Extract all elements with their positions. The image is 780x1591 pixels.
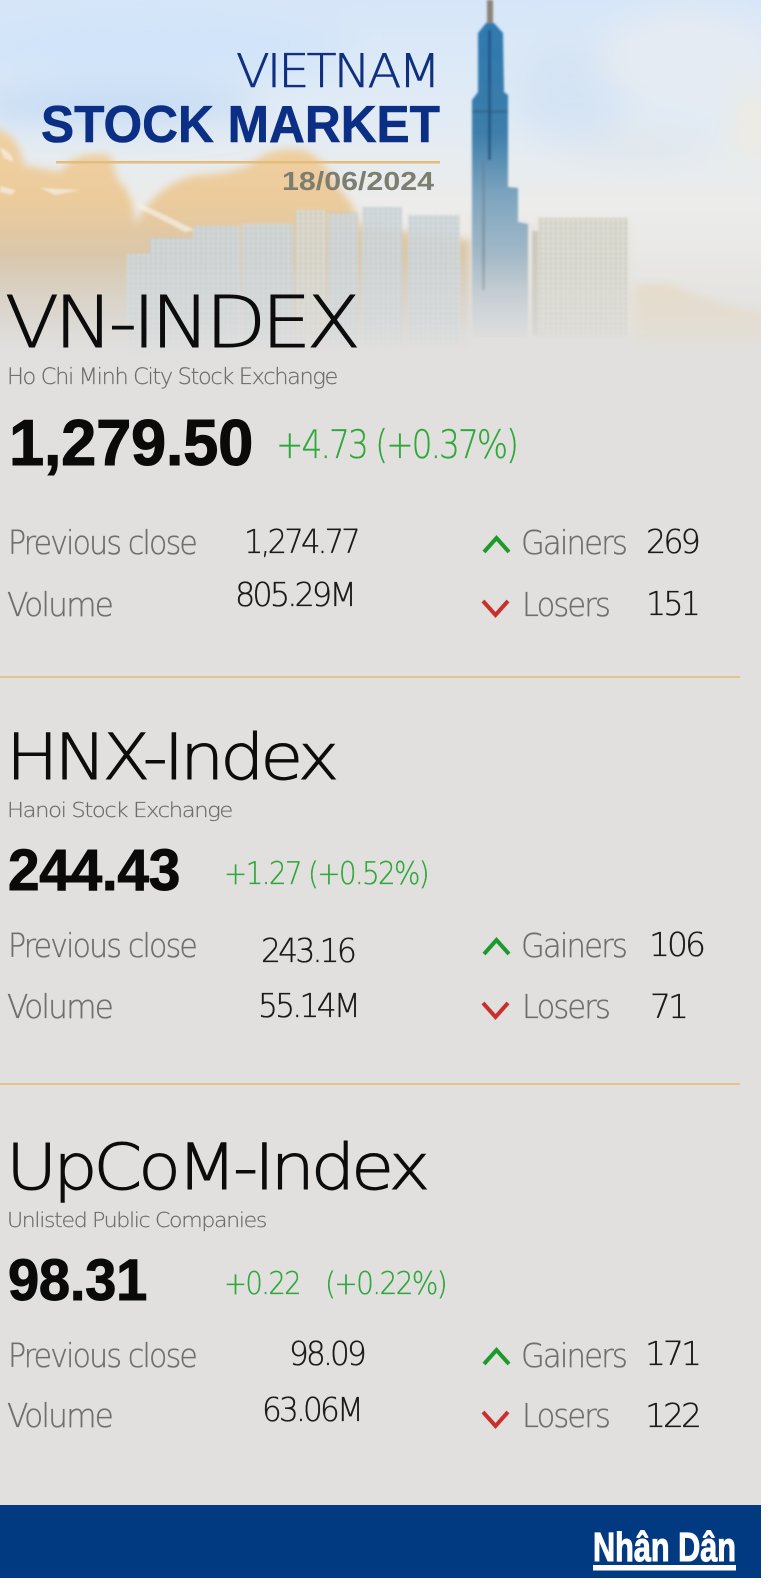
index change: +4.73 (+0.37%) — [276, 423, 517, 468]
icon: gainers arrow — [484, 1350, 509, 1364]
losers value: 151 — [646, 584, 698, 623]
icon: gainers arrow — [484, 538, 509, 552]
losers value: 122 — [645, 1396, 699, 1435]
title: VIETNAM — [236, 44, 438, 98]
index value: 1,279.50 — [9, 406, 253, 479]
volume label: Volume — [7, 987, 112, 1026]
heading: UpCoM-Index: UpCoM-Index — [6, 1131, 427, 1204]
clouds — [0, 126, 761, 337]
heading: HNX-Index: HNX-Index — [6, 721, 336, 794]
tower — [472, 0, 528, 337]
volume value: 63.06M — [262, 1390, 361, 1429]
exchange name: Hanoi Stock Exchange — [7, 798, 232, 822]
volume label: Volume — [7, 1396, 112, 1435]
volume label: Volume — [7, 585, 112, 624]
icon: losers arrow — [483, 1003, 508, 1017]
losers label: Losers — [522, 1396, 609, 1435]
icon: gainers arrow — [484, 940, 509, 954]
gainers value: 106 — [649, 925, 704, 964]
logo: Nhân Dân: Nhân Dân — [593, 1524, 736, 1570]
panel: UpCoM-Index — [6, 1131, 699, 1435]
gainers value: 269 — [646, 522, 699, 561]
gainers label: Gainers — [521, 1336, 626, 1375]
heading: VN-INDEX: VN-INDEX — [5, 281, 357, 364]
footer bar — [0, 1505, 761, 1578]
icon: losers arrow — [483, 1412, 508, 1426]
index change: +0.22 — [224, 1266, 300, 1302]
previous close label: Previous close — [8, 523, 196, 562]
icon: losers arrow — [483, 601, 508, 615]
losers value: 71 — [650, 987, 686, 1026]
cloud highlights — [0, 148, 195, 232]
previous close label: Previous close — [8, 1336, 196, 1375]
index change: +1.27 (+0.52%) — [224, 856, 428, 892]
date: 18/06/2024 — [282, 166, 435, 196]
gainers value: 171 — [645, 1334, 699, 1373]
exchange name: Ho Chi Minh City Stock Exchange — [7, 365, 337, 390]
index change: (+0.22%) — [325, 1266, 446, 1302]
volume value: 805.29M — [235, 575, 354, 614]
previous close label: Previous close — [8, 926, 196, 965]
gainers label: Gainers — [521, 523, 626, 562]
previous close value: 1,274.77 — [244, 522, 358, 561]
volume value: 55.14M — [258, 986, 358, 1025]
previous close value: 98.09 — [289, 1334, 365, 1373]
losers label: Losers — [522, 585, 609, 624]
gainers label: Gainers — [521, 926, 626, 965]
date line — [56, 161, 440, 164]
buildings — [126, 206, 628, 335]
exchange name: Unlisted Public Companies — [7, 1208, 266, 1232]
index change — [224, 1266, 446, 1302]
panel: VN-INDEX — [5, 281, 699, 624]
title — [41, 44, 440, 154]
header photo: sky, clouds and skyline — [0, 0, 761, 336]
previous close value: 243.16 — [261, 931, 355, 970]
title: STOCK MARKET — [41, 96, 440, 154]
index value: 98.31 — [8, 1248, 147, 1313]
losers label: Losers — [522, 987, 609, 1026]
index value: 244.43 — [8, 838, 180, 903]
panel: HNX-Index — [6, 721, 704, 1026]
